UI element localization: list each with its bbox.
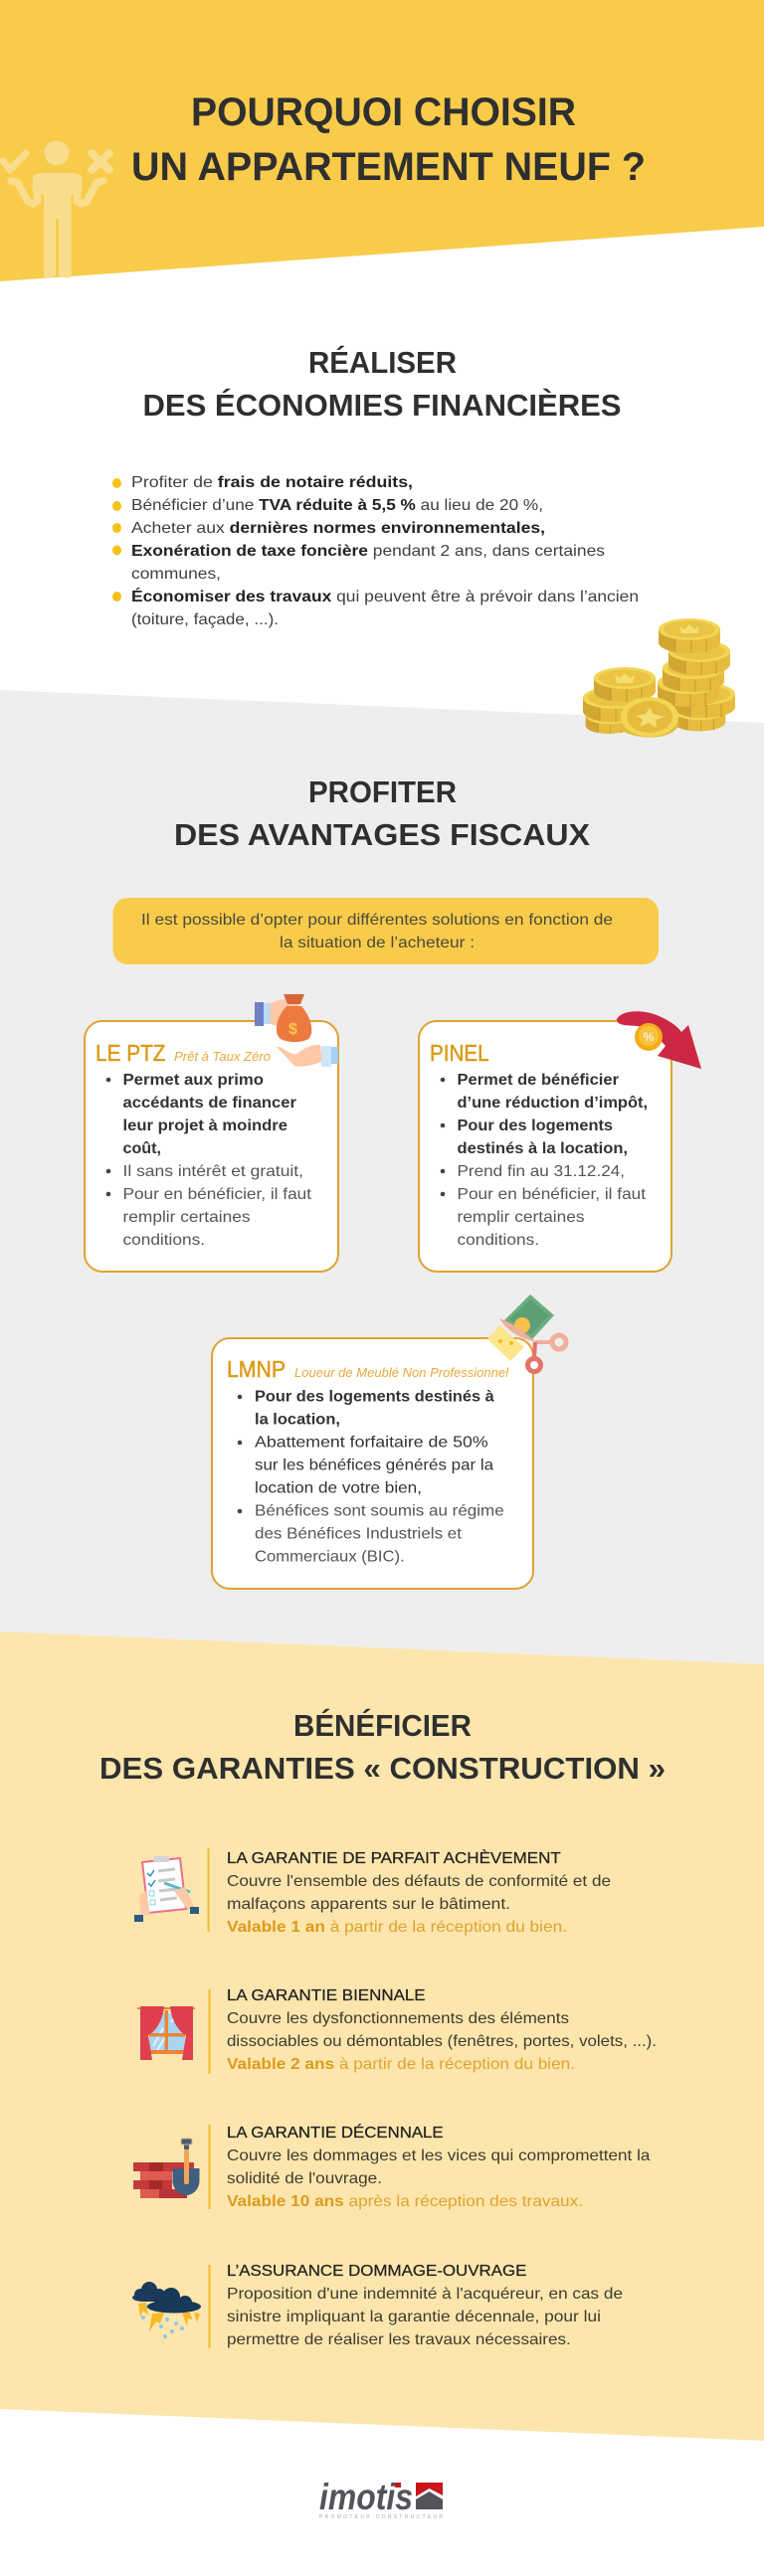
panel: grey tax section background xyxy=(0,690,764,1664)
icon: red downward arrow with percent coin: % xyxy=(644,1030,655,1044)
icon: stacks of gold coins xyxy=(583,618,735,738)
text block: malfaçons apparents sur le bâtiment. xyxy=(227,1896,510,1913)
text block: PTZ bullet list: accédants de financer xyxy=(123,1095,296,1112)
icon: person weighing check and cross xyxy=(3,141,109,277)
text block: PINEL bullet list: Permet de bénéficier xyxy=(458,1072,619,1089)
text block: Couvre l'ensemble des défauts de conformité et de xyxy=(227,1873,611,1890)
text block: solidité de l'ouvrage. xyxy=(227,2170,382,2187)
panel: assurance dommage-ouvrage xyxy=(132,2263,623,2348)
text block: PTZ bullet list: Pour en bénéficier, il faut xyxy=(123,1186,312,1203)
text block xyxy=(227,1987,657,2073)
icon: clipboard checklist xyxy=(134,1856,199,1922)
panel: LE PTZ card xyxy=(85,994,338,1272)
text block: financial savings list: Économiser des travaux qui peuvent être à prévoir dans l’ancien xyxy=(131,587,639,605)
title: UN APPARTEMENT NEUF ? xyxy=(131,145,646,189)
panel: garantie de parfait achèvement xyxy=(134,1848,611,1936)
text block: financial savings list: communes, xyxy=(131,566,221,583)
text block: financial savings list: Exonération de taxe foncière pendant 2 ans, dans certaines xyxy=(131,543,605,560)
text block: financial savings list: Acheter aux dernières normes environnementales, xyxy=(131,520,545,537)
heading: réaliser des économies financières: RÉALISER xyxy=(308,345,457,380)
text block: LMNP bullet list: location de votre bien, xyxy=(255,1479,422,1497)
logo: imotis: imotis xyxy=(319,2477,413,2517)
text block: dissociables ou démontables (fenêtres, portes, volets, ...). xyxy=(227,2033,657,2050)
text block: Valable 1 an à partir de la réception du bien. xyxy=(227,1919,567,1936)
text block: LA GARANTIE BIENNALE xyxy=(227,1987,426,2004)
text block: PINEL bullet list: Pour en bénéficier, il faut xyxy=(458,1186,647,1203)
text block: LMNP bullet list: Abattement forfaitaire de 50% xyxy=(255,1434,488,1452)
text block: LMNP bullet list: sur les bénéfices générés par la xyxy=(255,1458,493,1473)
text block: financial savings list: Profiter de frais de notaire réduits, xyxy=(131,474,413,491)
panel: cream guarantees section background xyxy=(0,1631,764,2441)
panel: garantie biennale xyxy=(137,1987,657,2074)
text block: Couvre les dysfonctionnements des éléments xyxy=(227,2010,569,2027)
icon: bricks and shovel xyxy=(133,2139,199,2198)
text block: Couvre les dommages et les vices qui compromettent la xyxy=(227,2147,651,2164)
text block xyxy=(227,2123,651,2210)
text block: PTZ bullet list: coût, xyxy=(123,1140,161,1157)
text block: LMNP bullet list: Pour des logements destinés à xyxy=(255,1388,494,1406)
text block: PTZ bullet list: leur projet à moindre xyxy=(123,1117,287,1134)
text block xyxy=(227,1848,611,1936)
heading: LMNP: LMNP xyxy=(227,1356,286,1382)
panel: LMNP card xyxy=(212,1294,566,1589)
text block: LMNP bullet list: Commerciaux (BIC). xyxy=(255,1549,405,1565)
text block: PINEL bullet list xyxy=(441,1072,648,1249)
text block: PTZ bullet list: conditions. xyxy=(123,1232,205,1249)
text block: PTZ bullet list: Permet aux primo xyxy=(123,1072,264,1089)
text block: permettre de réaliser les travaux nécessaires. xyxy=(227,2331,571,2348)
title: POURQUOI CHOISIR xyxy=(191,90,576,134)
heading: profiter des avantages fiscaux: PROFITER xyxy=(308,774,457,809)
text block: LMNP bullet list: des Bénéfices Industriels et xyxy=(255,1525,463,1543)
text block: LA GARANTIE DÉCENNALE xyxy=(227,2123,444,2142)
text block: LMNP bullet list: Bénéfices sont soumis au régime xyxy=(255,1503,504,1519)
heading: profiter des avantages fiscaux xyxy=(174,774,590,852)
icon: storm clouds with lightning and rain xyxy=(132,2282,201,2338)
text block: PTZ bullet list: Il sans intérêt et gratuit, xyxy=(123,1163,303,1180)
panel: garantie décennale xyxy=(133,2123,651,2210)
text block: L’ASSURANCE DOMMAGE-OUVRAGE xyxy=(227,2263,526,2280)
logo: imotis: PROMOTEUR CONSTRUCTEUR xyxy=(319,2514,443,2520)
divider bar xyxy=(209,1989,211,2074)
heading: réaliser des économies financières: DES ÉCONOMIES FINANCIÈRES xyxy=(143,388,621,423)
title xyxy=(131,90,646,189)
text block: Valable 2 ans à partir de la réception du bien. xyxy=(227,2056,575,2073)
text block xyxy=(227,2263,623,2348)
panel: PINEL card xyxy=(419,1011,701,1272)
callout: intro on available solutions xyxy=(113,898,659,964)
divider bar xyxy=(209,2265,211,2348)
heading: bénéficier des garanties construction: BÉNÉFICIER xyxy=(293,1708,472,1743)
text block: financial savings list: (toiture, façade, ...). xyxy=(131,611,279,628)
text block: PTZ bullet list xyxy=(106,1072,312,1249)
text block: PINEL bullet list: Pour des logements xyxy=(458,1117,613,1134)
text block: PINEL bullet list: destinés à la location, xyxy=(458,1140,628,1157)
icon: window with red curtains xyxy=(137,2006,195,2060)
icon: scissors cutting banknote and coupon xyxy=(487,1294,566,1372)
icon: red downward arrow with percent coin xyxy=(617,1011,701,1069)
text block: PINEL bullet list: conditions. xyxy=(458,1232,539,1249)
text block: PINEL bullet list: d’une réduction d’impôt, xyxy=(458,1095,648,1112)
icon: hand passing money bag to open hand: $ xyxy=(288,1021,297,1038)
icon: hand passing money bag to open hand xyxy=(255,994,338,1067)
panel: header band xyxy=(0,0,764,281)
text block: sinistre impliquant la garantie décennale, pour lui xyxy=(227,2309,601,2325)
heading: LE PTZ: Prêt à Taux Zéro xyxy=(174,1049,271,1064)
text block: Valable 10 ans après la réception des travaux. xyxy=(227,2193,583,2210)
heading: profiter des avantages fiscaux: DES AVANTAGES FISCAUX xyxy=(174,817,590,852)
text block: financial savings list: Bénéficier d’une TVA réduite à 5,5 % au lieu de 20 %, xyxy=(131,497,543,514)
callout: intro on available solutions: la situation de l’acheteur : xyxy=(280,935,475,951)
text block: LMNP bullet list: la location, xyxy=(255,1412,340,1428)
heading: LE PTZ: LE PTZ xyxy=(96,1040,165,1066)
heading: LMNP xyxy=(227,1356,509,1382)
heading: PINEL: PINEL xyxy=(430,1040,489,1066)
text block: PTZ bullet list: remplir certaines xyxy=(123,1209,251,1226)
text block: LA GARANTIE DE PARFAIT ACHÈVEMENT xyxy=(227,1848,561,1867)
text block: LMNP bullet list xyxy=(238,1388,504,1565)
heading: bénéficier des garanties construction: DES GARANTIES « CONSTRUCTION » xyxy=(99,1751,666,1786)
text block: financial savings list xyxy=(112,474,639,628)
text block: PINEL bullet list: Prend fin au 31.12.24, xyxy=(458,1163,625,1180)
heading: LE PTZ xyxy=(96,1040,271,1066)
callout: intro on available solutions: Il est possible d’opter pour différentes solutions en fonction de xyxy=(141,912,613,929)
text block: PINEL bullet list: remplir certaines xyxy=(458,1209,585,1226)
heading: réaliser des économies financières xyxy=(143,345,621,423)
text block: Proposition d'une indemnité à l'acquéreur, en cas de xyxy=(227,2286,623,2303)
divider bar xyxy=(209,2125,211,2209)
divider bar xyxy=(207,1848,209,1932)
heading: bénéficier des garanties construction xyxy=(99,1708,666,1786)
heading: LMNP: Loueur de Meublé Non Professionnel xyxy=(294,1365,509,1380)
